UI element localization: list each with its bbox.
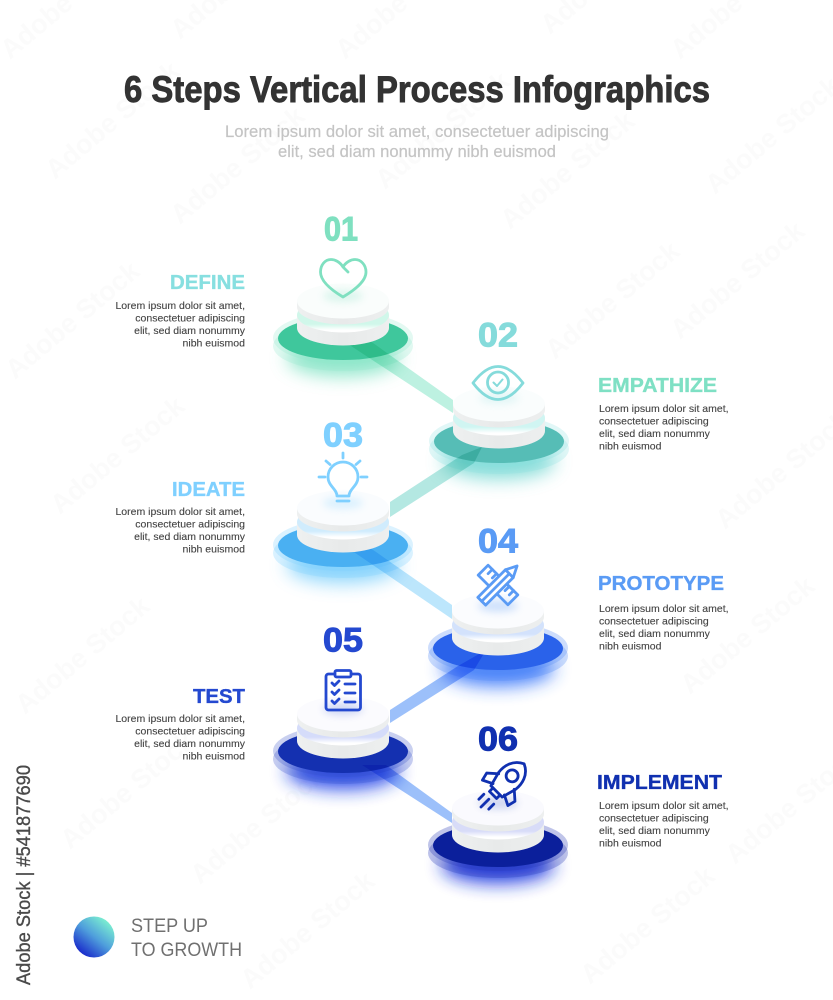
label: test: consectetuer adipiscing — [135, 726, 245, 738]
label: prototype — [598, 573, 729, 652]
logo text — [131, 916, 242, 961]
cylinder 2 — [453, 386, 545, 449]
number 06: 06 — [478, 720, 518, 758]
connector 1 to 2 — [345, 338, 453, 413]
stock watermark pattern: Adobe Stock — [540, 235, 686, 365]
label: empathize: elit, sed diam nonummy — [599, 428, 711, 440]
label: test: elit, sed diam nonummy — [134, 738, 246, 750]
label: ideate: Lorem ipsum dolor sit amet, — [115, 506, 245, 518]
logo circle — [74, 916, 114, 958]
logo text: STEP UP — [131, 916, 208, 937]
icon: clipboard checklist — [326, 670, 360, 710]
subtitle: Lorem ipsum dolor sit amet, consectetuer adipiscing — [225, 123, 609, 141]
cylinder 3 — [297, 490, 389, 552]
stock watermark pattern: Adobe Stock — [45, 390, 191, 520]
icon: eye — [473, 366, 523, 400]
label: empathize — [598, 375, 729, 452]
number 05: 05 — [323, 622, 363, 660]
stock watermark pattern: Adobe Stock — [665, 215, 811, 345]
label: implement: nibh euismod — [599, 838, 662, 850]
label: prototype: nibh euismod — [599, 640, 662, 652]
label: test: Lorem ipsum dolor sit amet, — [115, 713, 245, 725]
label: define: DEFINE — [170, 272, 245, 294]
logo text: TO GROWTH — [131, 940, 242, 961]
cylinder 1 — [297, 284, 389, 346]
label: empathize: EMPATHIZE — [598, 375, 717, 397]
stock watermark pattern: Adobe Stock — [235, 865, 381, 995]
connector 5 to 6 — [362, 765, 452, 823]
connector 3 to 4 — [348, 545, 452, 619]
cylinder 5 — [297, 696, 389, 758]
label: prototype: elit, sed diam nonummy — [599, 628, 711, 640]
label: prototype: Lorem ipsum dolor sit amet, — [599, 603, 729, 615]
base platform 4 — [428, 622, 568, 686]
label: implement — [597, 772, 729, 850]
stock watermark pattern: Adobe Stock — [10, 590, 156, 720]
number 03: 03 — [323, 416, 363, 454]
label: define: elit, sed diam nonummy — [134, 325, 246, 337]
label: define — [115, 272, 246, 350]
title: 6 Steps Vertical Process Infographics — [124, 69, 710, 110]
base platform 2 — [429, 415, 569, 479]
label: define: Lorem ipsum dolor sit amet, — [115, 300, 245, 312]
label: define: nibh euismod — [183, 338, 245, 350]
label: ideate: nibh euismod — [183, 544, 245, 556]
icon: heart — [320, 260, 366, 297]
stock watermark pattern: Adobe Stock — [495, 105, 641, 235]
label: ideate: elit, sed diam nonummy — [134, 531, 246, 543]
cylinder 4 — [452, 594, 544, 656]
label: ideate: IDEATE — [172, 479, 245, 501]
label: implement: elit, sed diam nonummy — [599, 825, 711, 837]
icon: rocket — [467, 750, 538, 821]
cylinder 6 — [452, 790, 544, 852]
stock id vertical text: Adobe Stock | #541877690 — [14, 765, 35, 985]
base platform 1 — [273, 312, 413, 376]
label: implement: consectetuer adipiscing — [599, 812, 709, 824]
label: test: TEST — [193, 686, 245, 708]
stock watermark pattern: Adobe Stock — [675, 570, 821, 700]
stock watermark pattern: Adobe Stock — [185, 760, 331, 890]
number 04: 04 — [478, 522, 518, 560]
stock watermark pattern: Adobe Stock — [165, 100, 311, 230]
label: ideate: consectetuer adipiscing — [135, 518, 245, 530]
base platform 5 — [273, 725, 413, 789]
label: test: nibh euismod — [183, 750, 245, 762]
icon: light bulb — [319, 453, 367, 501]
connector 4 to 5 — [390, 650, 486, 723]
subtitle — [225, 123, 609, 161]
subtitle: elit, sed diam nonummy nibh euismod — [278, 143, 556, 161]
label: test — [115, 686, 246, 762]
label: prototype: consectetuer adipiscing — [599, 616, 709, 628]
label: implement: Lorem ipsum dolor sit amet, — [599, 800, 729, 812]
connector 2 to 3 — [390, 447, 482, 517]
label: prototype: PROTOTYPE — [598, 573, 724, 595]
label: empathize: Lorem ipsum dolor sit amet, — [599, 403, 729, 415]
stock watermark pattern: Adobe Stock — [55, 725, 201, 855]
stock watermark pattern: Adobe Stock — [0, 255, 146, 385]
label: empathize: consectetuer adipiscing — [599, 416, 709, 428]
stock watermark pattern: Adobe Stock — [575, 860, 721, 990]
label: ideate — [115, 479, 246, 556]
base platform 6 — [428, 819, 568, 883]
stock watermark pattern: Adobe Stock — [40, 55, 186, 185]
base platform 3 — [273, 519, 413, 583]
label: define: consectetuer adipiscing — [135, 312, 245, 324]
number 02: 02 — [478, 316, 518, 354]
icon: ruler and pencil — [478, 562, 521, 605]
label: empathize: nibh euismod — [599, 440, 662, 452]
label: implement: IMPLEMENT — [597, 772, 722, 794]
number 01: 01 — [324, 210, 358, 248]
stock watermark pattern: Adobe Stock — [370, 65, 516, 195]
